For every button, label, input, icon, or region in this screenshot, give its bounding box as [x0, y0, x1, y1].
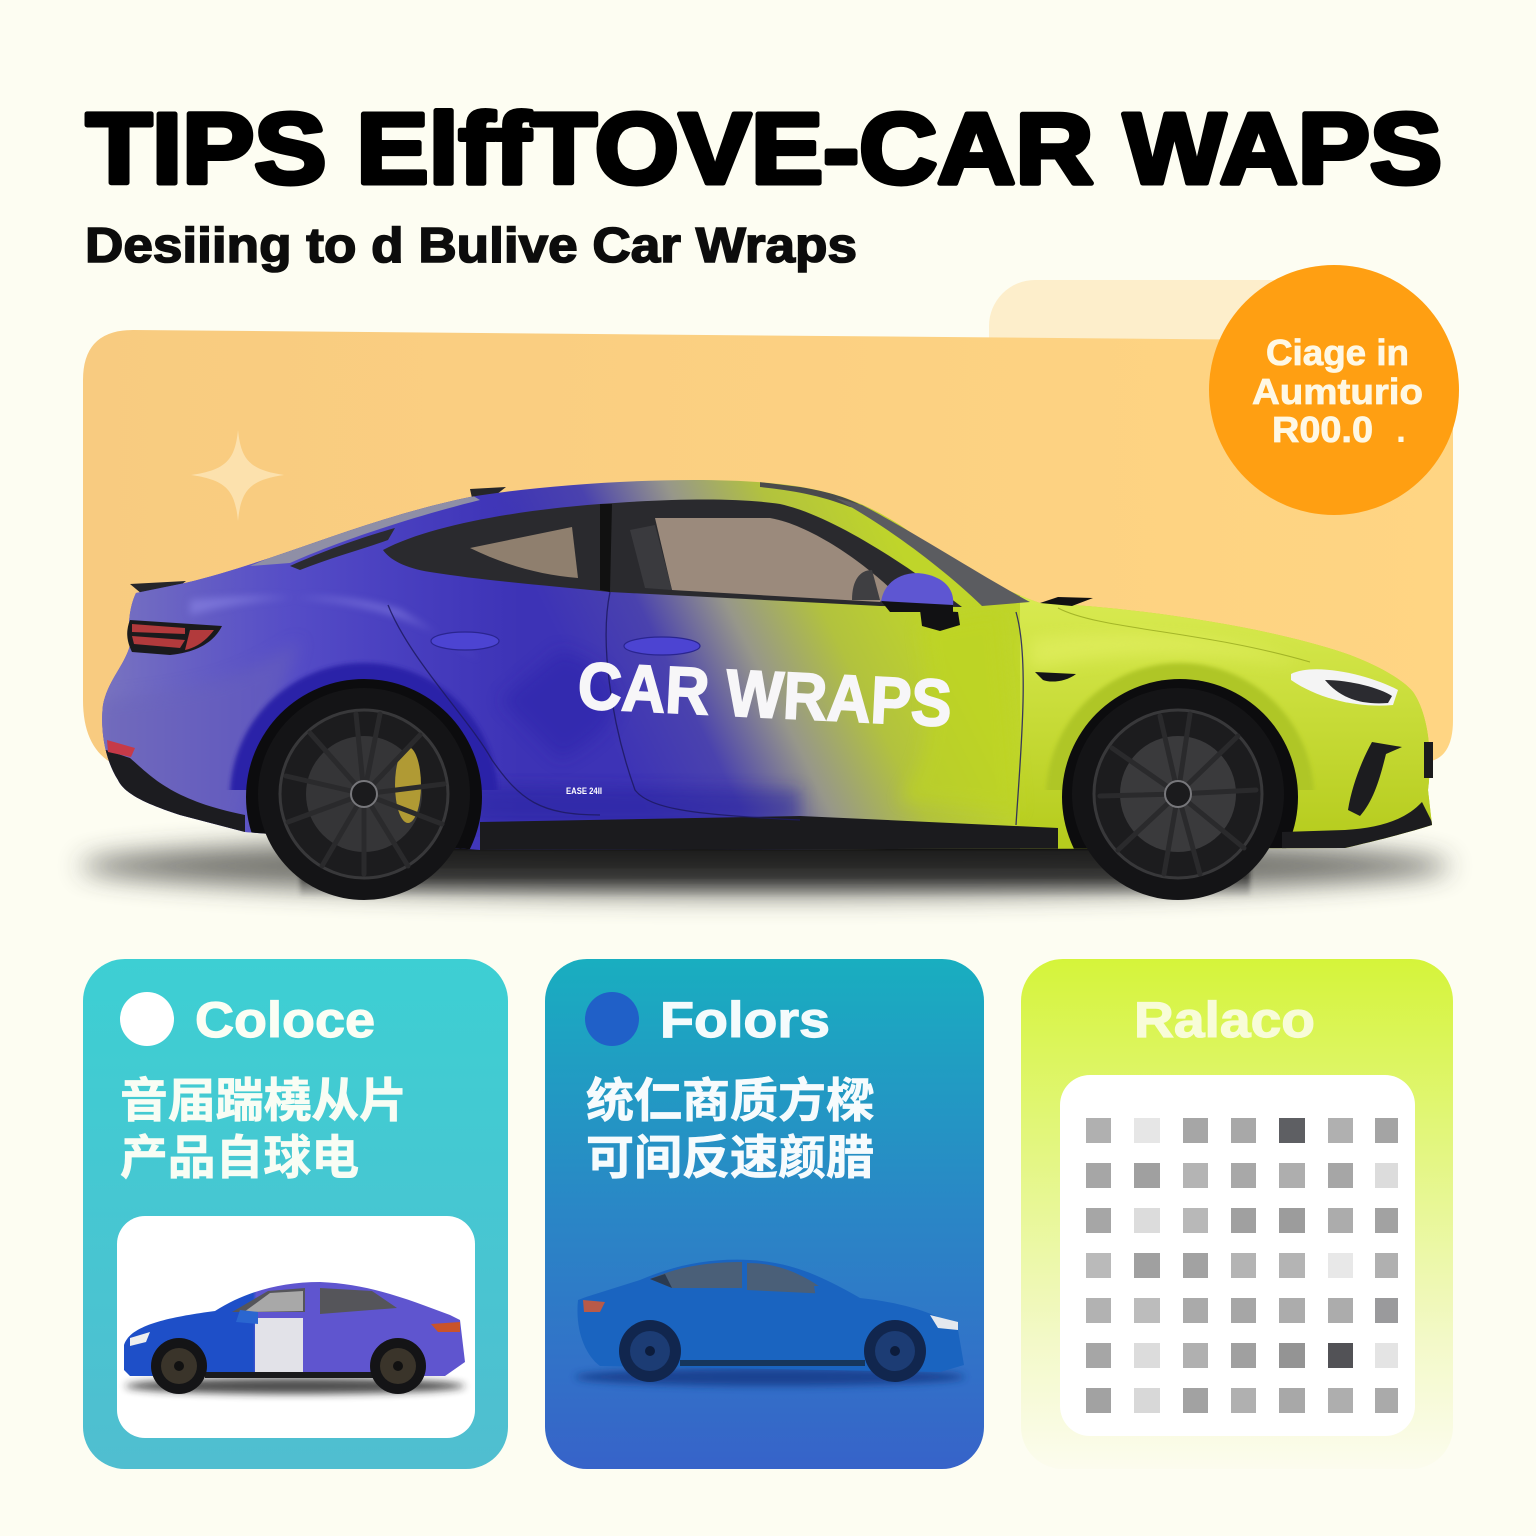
heading: Ralaco: Ralaco: [1134, 992, 1315, 1048]
text block: [586, 1074, 874, 1184]
wheel arch bands: [230, 663, 1314, 931]
spoiler and fin: [130, 487, 506, 595]
white grid panel: [1060, 1075, 1415, 1436]
small decal: EASE 24II: [566, 786, 602, 796]
badge: orange circle callout: Ciage in: [1266, 332, 1409, 373]
mini car: blue: [575, 1260, 965, 1386]
rocker: [480, 816, 1058, 852]
badge: orange circle callout: R00.0: [1272, 409, 1373, 450]
text block: 可间反速颜腊: [586, 1131, 874, 1184]
icon: blue dot: [585, 992, 639, 1046]
panel: card Coloce: [83, 959, 508, 1469]
rear reflector: [107, 740, 135, 757]
badge: orange circle callout: Aumturio: [1252, 371, 1423, 412]
swatch grid: [1086, 1118, 1398, 1413]
badge: orange circle callout: .: [1396, 409, 1406, 450]
car body: [102, 480, 1432, 850]
door handles: [431, 632, 499, 650]
taillight: [127, 620, 222, 655]
wiper: [1040, 597, 1093, 606]
roof grey strip: [250, 494, 480, 566]
panel: pale tab behind hero: [989, 280, 1319, 400]
panel: hero background: [83, 330, 1453, 762]
greenhouse dark glass: [383, 500, 962, 607]
plate edge: [1424, 742, 1433, 778]
hood line: [1058, 608, 1310, 662]
side marker: [1035, 672, 1076, 682]
wheel arches: [246, 679, 482, 850]
headlight: [1291, 669, 1398, 706]
icon: white dot: [120, 992, 174, 1046]
mini car: part-wrapped: [124, 1282, 465, 1394]
badge: orange circle callout: [1209, 265, 1459, 515]
text block: [120, 1074, 407, 1184]
vinyl text: CAR WRAPS: [576, 648, 953, 740]
rear wheel: [258, 688, 470, 900]
heading: Folors: Folors: [660, 992, 830, 1048]
title: TIPS ElffTOVE-CAR WAPS: [86, 93, 1442, 205]
front splitter: [1282, 802, 1436, 852]
rear bumper black: [106, 750, 245, 832]
pillar: [600, 504, 612, 592]
mirror: [881, 573, 953, 606]
windshield: [835, 498, 1030, 606]
text block: 音届踹橈从片: [120, 1074, 407, 1127]
front wheel: [1072, 688, 1284, 900]
icon: sparkle star: [191, 430, 284, 521]
panel: card Ralaco: [1021, 959, 1453, 1469]
hero car with gradient wrap: [100, 480, 1440, 931]
panel: card Folors: [545, 959, 984, 1469]
car shadow: [80, 836, 1450, 896]
subtitle: Desiiing to d Bulive Car Wraps: [85, 219, 857, 273]
door lines: [388, 592, 1023, 825]
text block: 产品自球电: [120, 1131, 359, 1184]
text block: 统仁商质方樑: [586, 1074, 874, 1127]
side glass: [470, 527, 578, 578]
heading: Coloce: Coloce: [195, 992, 375, 1048]
white image panel: [117, 1216, 475, 1438]
air intake: [1348, 742, 1402, 816]
